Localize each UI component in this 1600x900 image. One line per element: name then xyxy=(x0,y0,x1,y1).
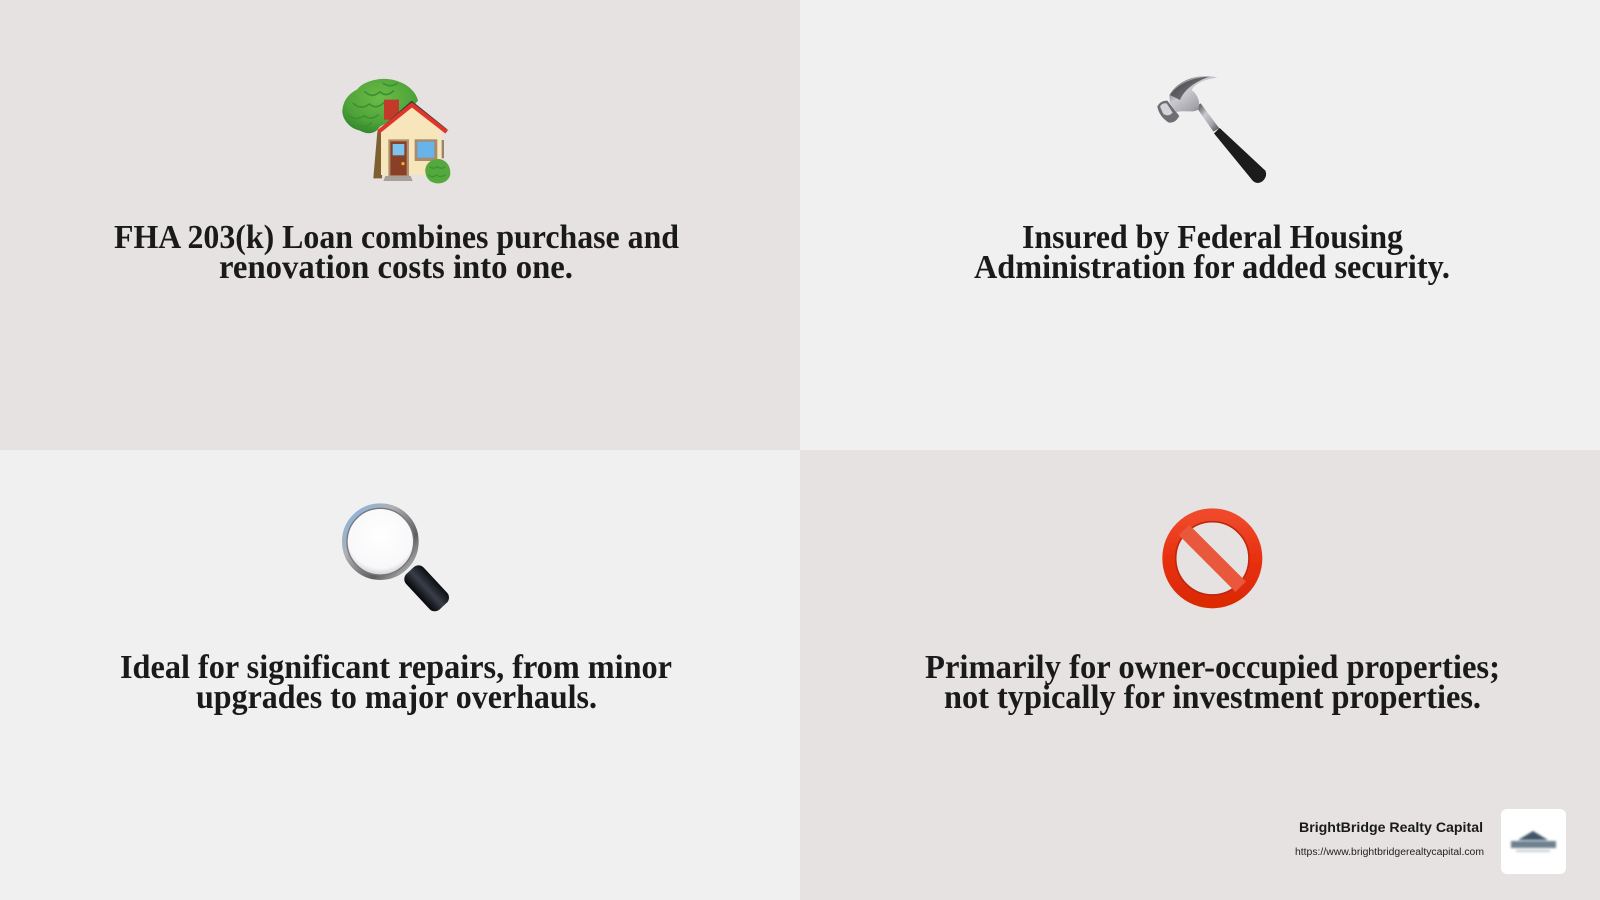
heading: insured by FHA: Insured by Federal Housing xyxy=(1022,219,1403,256)
icon: magnifying glass xyxy=(344,506,452,614)
heading: FHA 203(k) loan: renovation costs into one. xyxy=(219,249,573,286)
icon: house with tree xyxy=(342,79,450,183)
logo tile xyxy=(1501,809,1566,874)
heading: owner occupied xyxy=(925,649,1500,716)
panel: federal insurance xyxy=(800,0,1600,450)
heading: FHA 203(k) loan xyxy=(114,219,679,286)
icon: prohibited sign xyxy=(1169,515,1256,602)
brand url: https://www.brightbridgerealtycapital.com xyxy=(1295,847,1484,858)
heading: owner occupied: Primarily for owner-occupied properties; xyxy=(925,649,1500,686)
panel: owner occupied xyxy=(800,450,1600,900)
brand name: BrightBridge Realty Capital xyxy=(1299,819,1483,835)
icon: hammer xyxy=(1157,76,1266,183)
heading: FHA 203(k) loan: FHA 203(k) Loan combines purchase and xyxy=(114,219,679,256)
heading: insured by FHA xyxy=(974,219,1450,286)
brand block xyxy=(1295,809,1566,874)
heading: ideal for repairs: Ideal for significant repairs, from minor xyxy=(120,649,672,686)
heading: insured by FHA: Administration for added security. xyxy=(974,249,1450,286)
heading: ideal for repairs xyxy=(120,649,672,716)
panel: purchase and renovation xyxy=(0,0,800,450)
heading: owner occupied: not typically for investment properties. xyxy=(944,679,1481,716)
panel: significant repairs xyxy=(0,450,800,900)
heading: ideal for repairs: upgrades to major overhauls. xyxy=(196,679,597,716)
